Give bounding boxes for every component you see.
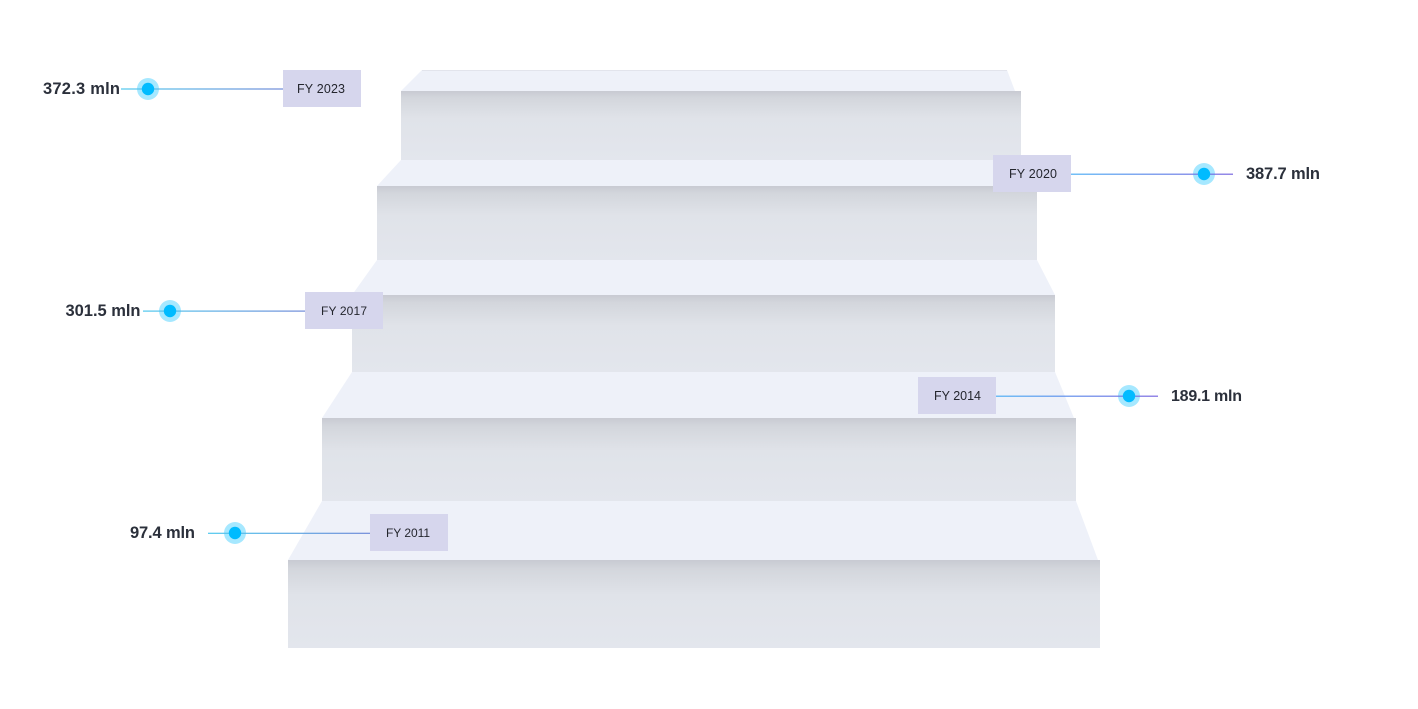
step: bottom (FY 2011) (288, 501, 1100, 648)
callout: FY 2014: 189.1 mln (1171, 388, 1242, 405)
callout: FY 2020 (993, 155, 1320, 192)
callout: FY 2020: FY 2020 (1009, 167, 1057, 181)
callout: FY 2017: 301.5 mln (66, 302, 140, 320)
step: top (FY 2023) (401, 70, 1021, 160)
callout: FY 2020: 387.7 mln (1246, 165, 1320, 183)
callout: FY 2023 (43, 70, 361, 107)
callout: FY 2011: 97.4 mln (130, 524, 195, 542)
callout: FY 2011: FY 2011 (386, 526, 430, 540)
callout: FY 2023: FY 2023 (297, 82, 345, 96)
stairs (288, 70, 1100, 648)
callout: FY 2014: FY 2014 (934, 389, 981, 403)
callout: FY 2014 (918, 377, 1242, 414)
step: third (FY 2017) (352, 260, 1055, 372)
step: second (FY 2020) (377, 160, 1037, 260)
callout: FY 2023: 372.3 mln (43, 80, 120, 98)
callout: FY 2017 (66, 292, 383, 329)
callout: FY 2017: FY 2017 (321, 304, 367, 318)
step: fourth (FY 2014) (322, 372, 1076, 501)
callout: FY 2011 (130, 514, 448, 551)
